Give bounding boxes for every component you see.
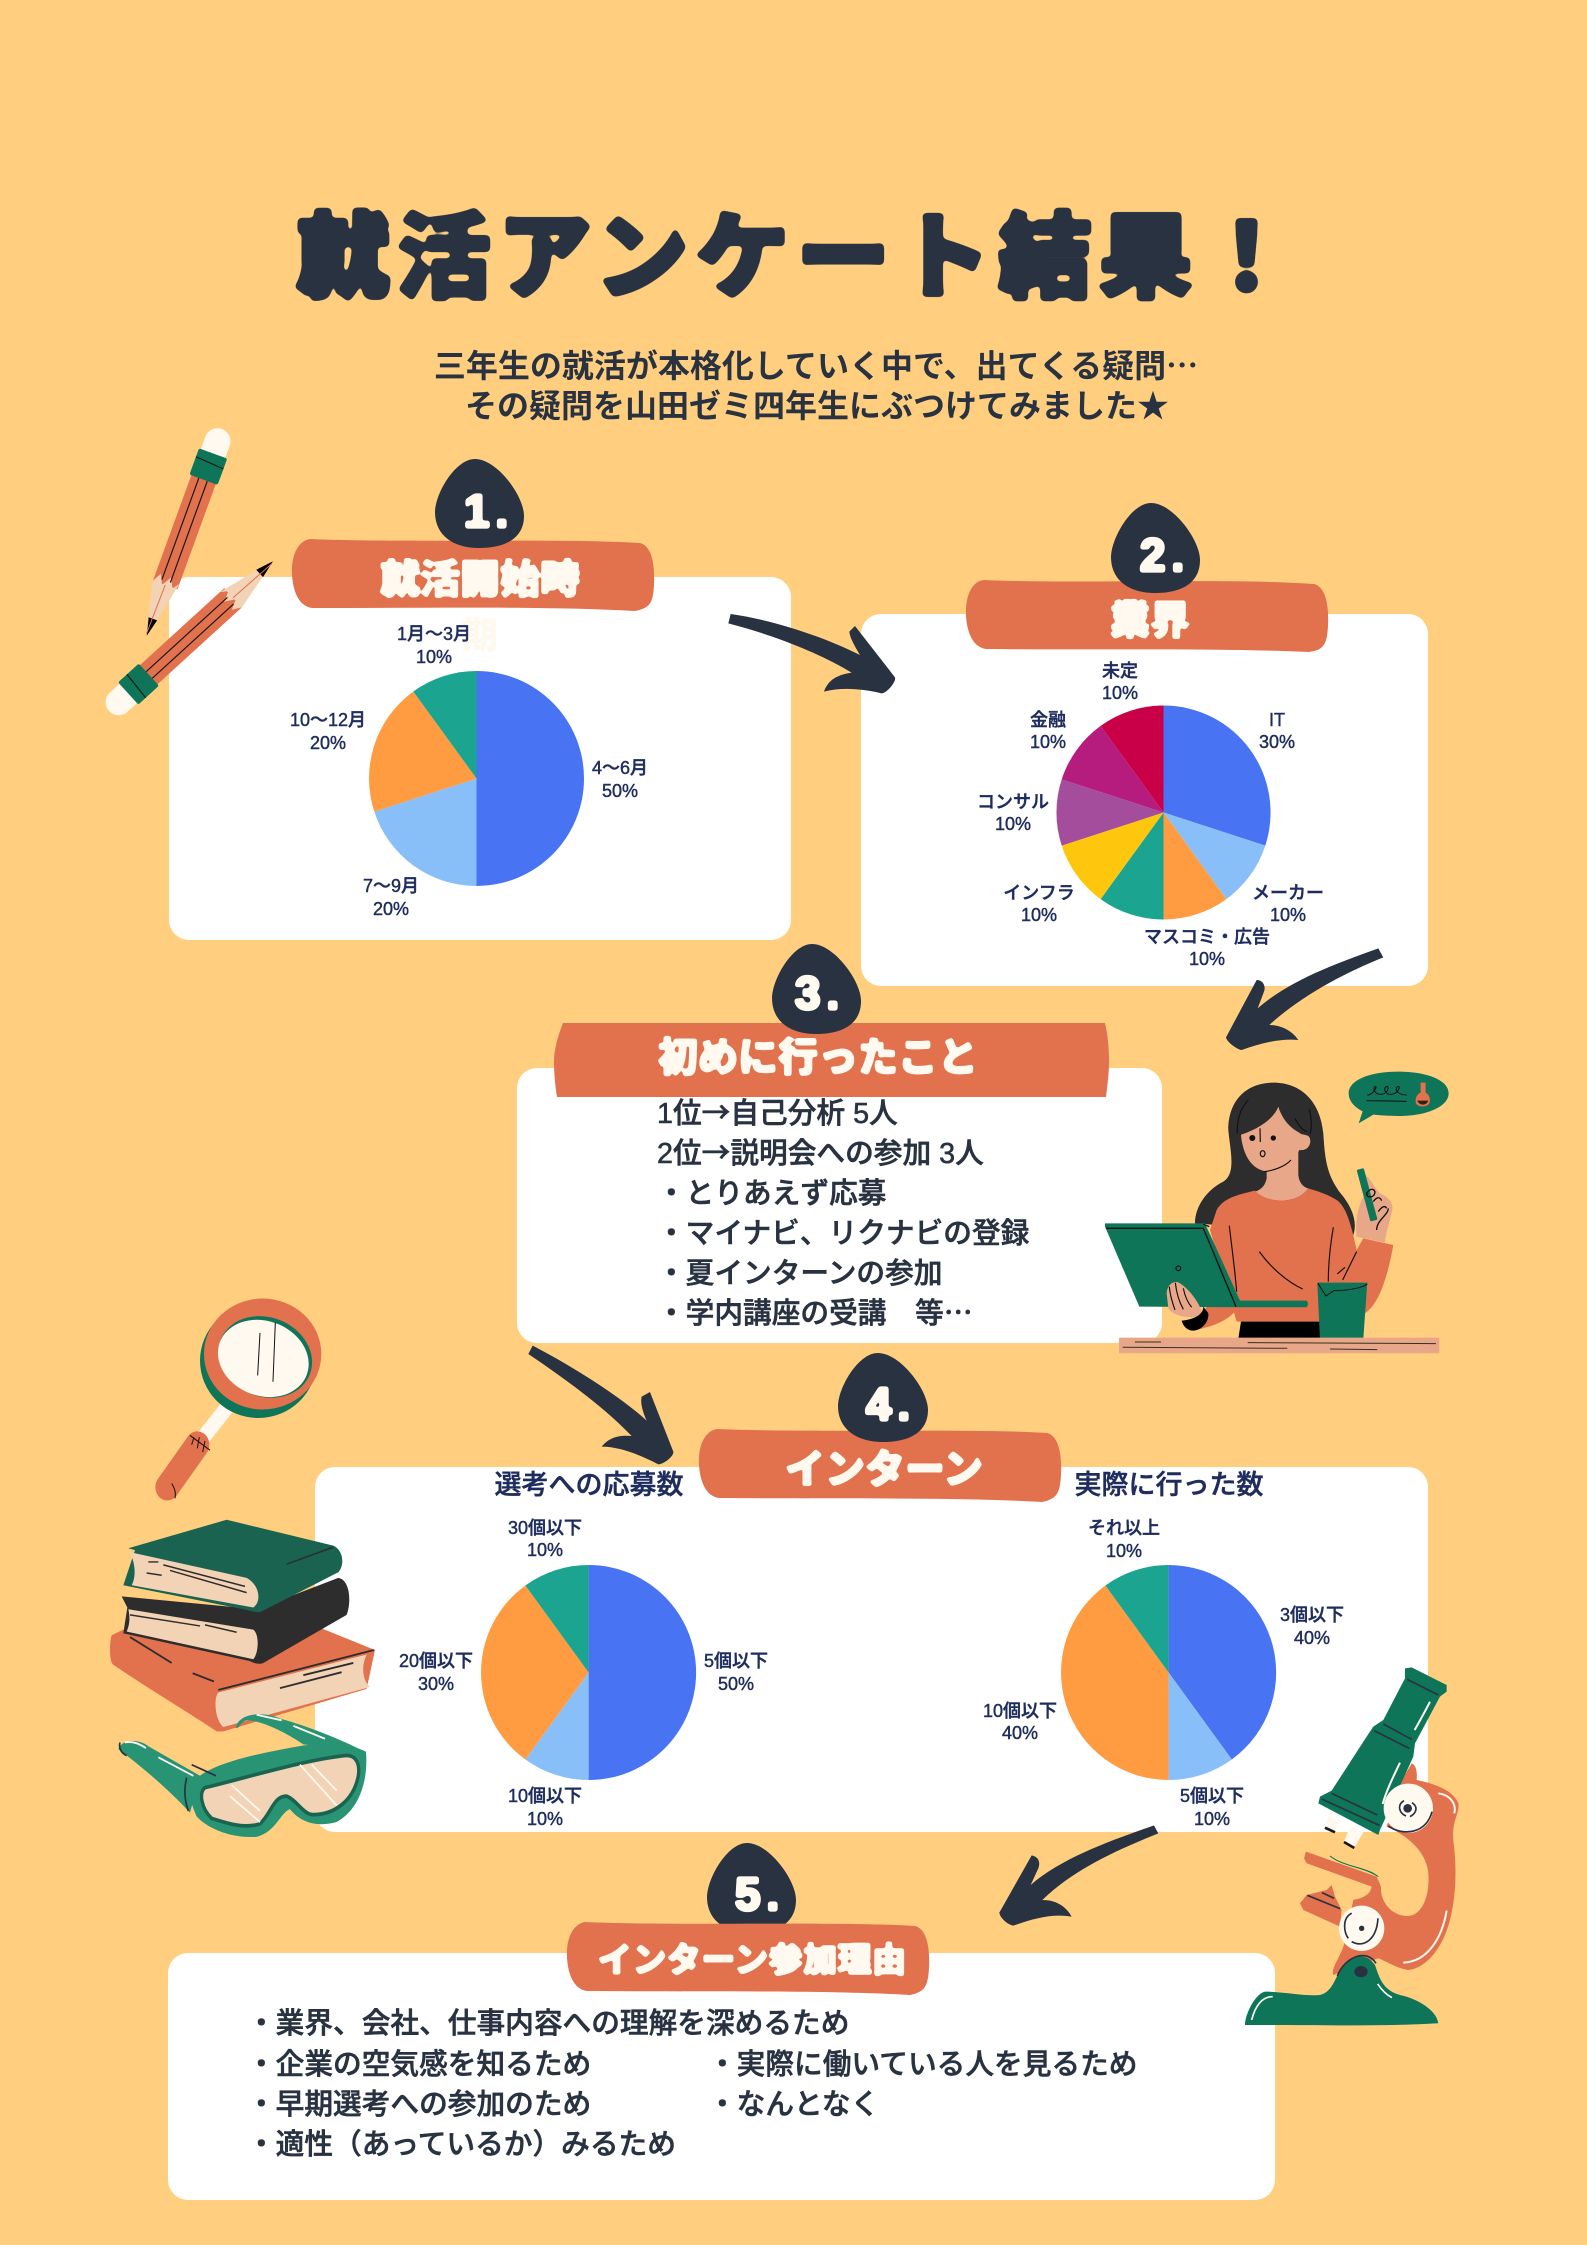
details (1229, 1226, 1357, 1292)
green tube (1318, 1667, 1447, 1835)
ranking list: 1位→自己分析 5人 (657, 1091, 898, 1132)
pie labels: applications: 10% (527, 1540, 563, 1560)
heading 1: banner and number (292, 459, 654, 611)
pie chart: applications (481, 1565, 696, 1780)
reasons list: ・なんとなく (708, 2089, 879, 2121)
ranking list: ・夏インターンの参加 (657, 1258, 942, 1290)
ranking list: ・マイナビ、リクナビの登録 (657, 1218, 1030, 1250)
icon: safety goggles (118, 1714, 366, 1837)
pie labels: start timing: 10〜12月 (290, 710, 366, 730)
icon: pencil lower (99, 550, 283, 722)
heading 1: banner and number: 1. (464, 485, 514, 537)
ranking list (657, 1091, 1030, 1332)
green book (123, 1520, 342, 1612)
pie labels: attended: 5個以下 (1180, 1786, 1244, 1806)
pie labels: industry: インフラ (1003, 883, 1075, 903)
heading 5: number and banner: 5. (735, 1868, 785, 1920)
reasons list: ・業界、会社、仕事内容への理解を深めるため (247, 2008, 849, 2040)
heading 3: banner and number: 初めに行ったこと (658, 1036, 978, 1080)
base (1245, 1956, 1438, 2025)
pie labels: attended: 10% (1106, 1541, 1142, 1561)
pie labels: industry: 10% (1189, 949, 1225, 969)
chart heading: attended: 実際に行った数 (1074, 1470, 1264, 1500)
pie labels: applications (399, 1518, 768, 1829)
raised hand (1356, 1174, 1393, 1243)
face (1241, 1103, 1310, 1172)
pie labels: industry: メーカー (1252, 883, 1324, 903)
icon: magnifying glass (167, 1298, 321, 1498)
pie labels: industry: コンサル (977, 792, 1049, 812)
heading 3: banner and number: 3. (795, 967, 845, 1019)
panel: internship reasons (168, 1953, 1275, 2200)
pie labels: applications: 10個以下 (508, 1786, 582, 1806)
pie labels: start timing: 4〜6月 (592, 758, 648, 778)
icon: woman with tablet (1105, 1072, 1449, 1353)
objective lenses (1325, 1815, 1342, 1832)
pie labels: industry: 10% (1270, 905, 1306, 925)
pie labels: industry: 10% (995, 814, 1031, 834)
stage clip (1330, 1856, 1378, 1877)
pie labels: industry: 10% (1102, 683, 1138, 703)
pie labels: industry: 10% (1030, 732, 1066, 752)
pie labels: industry (977, 661, 1324, 969)
sweater (1210, 1188, 1393, 1322)
hair (1195, 1083, 1355, 1235)
pie labels: start timing: 20% (373, 899, 409, 919)
pie chart: industry (1056, 706, 1271, 920)
heading 3: banner and number (554, 944, 1109, 1097)
pie labels: attended (983, 1518, 1344, 1829)
rim (200, 1303, 317, 1418)
pie chart: attended (1061, 1565, 1276, 1780)
lower stage (1300, 1885, 1342, 1927)
pie labels: start timing (290, 624, 648, 919)
chart heading: applications: 選考への応募数 (494, 1470, 684, 1500)
heading 5: number and banner: インターン参加理由 (598, 1942, 906, 1980)
panel: internship (315, 1467, 1428, 1832)
icon: pencil upper (133, 424, 236, 641)
pie labels: attended: 40% (1002, 1723, 1038, 1743)
subtitle: その疑問を山田ゼミ四年生にぶつけてみました★ (465, 388, 1169, 424)
pie labels: attended: 3個以下 (1280, 1605, 1344, 1625)
lower knob (1339, 1906, 1384, 1951)
pie labels: applications: 30個以下 (508, 1518, 582, 1538)
pie labels: start timing: 10% (416, 647, 452, 667)
pie labels: start timing: 20% (310, 733, 346, 753)
subtitle (434, 341, 1198, 424)
orange book (110, 1628, 375, 1731)
holding hand (1167, 1282, 1203, 1317)
pie labels: attended: 10% (1194, 1809, 1230, 1829)
arrow: 4 to 5 (999, 1825, 1158, 1926)
table (1119, 1338, 1439, 1353)
pie labels: industry: 金融 (1030, 710, 1066, 730)
arrow: 1 to 2 (728, 614, 895, 693)
ranking list: ・とりあえず応募 (657, 1178, 887, 1210)
heading 5: number and banner (567, 1843, 929, 1995)
pie labels: applications: 10% (527, 1809, 563, 1829)
heading 4: banner and number (699, 1353, 1061, 1502)
reasons list: ・企業の空気感を知るため (247, 2049, 591, 2081)
upper knob (1384, 1784, 1433, 1833)
heading 2: banner and number (966, 503, 1328, 652)
pie labels: industry: マスコミ・広告 (1144, 927, 1270, 947)
heading 4: banner and number: インターン (785, 1448, 983, 1492)
ranking list: ・学内講座の受講 等… (657, 1291, 973, 1332)
subtitle: 三年生の就活が本格化していく中で、出てくる疑問… (434, 341, 1198, 387)
title: 就活アンケート結果！ (296, 205, 1300, 310)
icon: stack of books (110, 1520, 375, 1731)
pie labels: start timing: 50% (602, 781, 638, 801)
heading 1: banner and number: 就活開始時 (380, 558, 580, 602)
icon: microscope (1245, 1667, 1459, 2025)
fringe (1237, 1087, 1312, 1136)
faint hidden character: 期 (462, 615, 498, 656)
pie labels: attended: それ以上 (1088, 1518, 1160, 1538)
heading 2: banner and number: 2. (1140, 529, 1190, 581)
pie labels: start timing: 7〜9月 (363, 876, 419, 896)
pie labels: start timing: 1月〜3月 (397, 624, 471, 644)
pie labels: industry: 30% (1259, 732, 1295, 752)
arrow: 2 to 3 (1226, 948, 1383, 1050)
handle (205, 1406, 228, 1435)
black trousers (1238, 1322, 1321, 1339)
highlights (1403, 1793, 1455, 1963)
reasons list: ・早期選考への参加のため (247, 2089, 591, 2121)
panel: first actions (517, 1068, 1162, 1343)
pie labels: applications: 50% (718, 1674, 754, 1694)
heading 4: banner and number: 4. (866, 1378, 916, 1430)
reasons list: ・適性（あっているか）みるため (247, 2129, 676, 2161)
pie labels: attended: 10個以下 (983, 1701, 1057, 1721)
arrow: 3 to 4 (528, 1346, 673, 1464)
beaker (1317, 1283, 1367, 1339)
pie chart: start timing (369, 671, 584, 886)
pie labels: applications: 30% (418, 1674, 454, 1694)
speech bubble (1349, 1072, 1449, 1123)
panel: industry (861, 614, 1428, 986)
pie labels: industry: IT (1269, 710, 1285, 730)
pie labels: attended: 40% (1294, 1628, 1330, 1648)
ranking list: 2位→説明会への参加 3人 (657, 1131, 984, 1172)
heading 2: banner and number: 業界 (1110, 599, 1190, 643)
neck (1255, 1150, 1308, 1201)
pie labels: applications: 20個以下 (399, 1651, 473, 1671)
pie labels: applications: 5個以下 (704, 1651, 768, 1671)
black book (122, 1578, 349, 1664)
reasons list (247, 2008, 1137, 2161)
pie labels: industry: 10% (1021, 905, 1057, 925)
reasons list: ・実際に働いている人を見るため (708, 2049, 1137, 2081)
pie labels: industry: 未定 (1102, 661, 1138, 681)
panel: start timing (169, 577, 791, 940)
orange arm (1304, 1763, 1459, 1975)
tablet (1105, 1223, 1308, 1307)
